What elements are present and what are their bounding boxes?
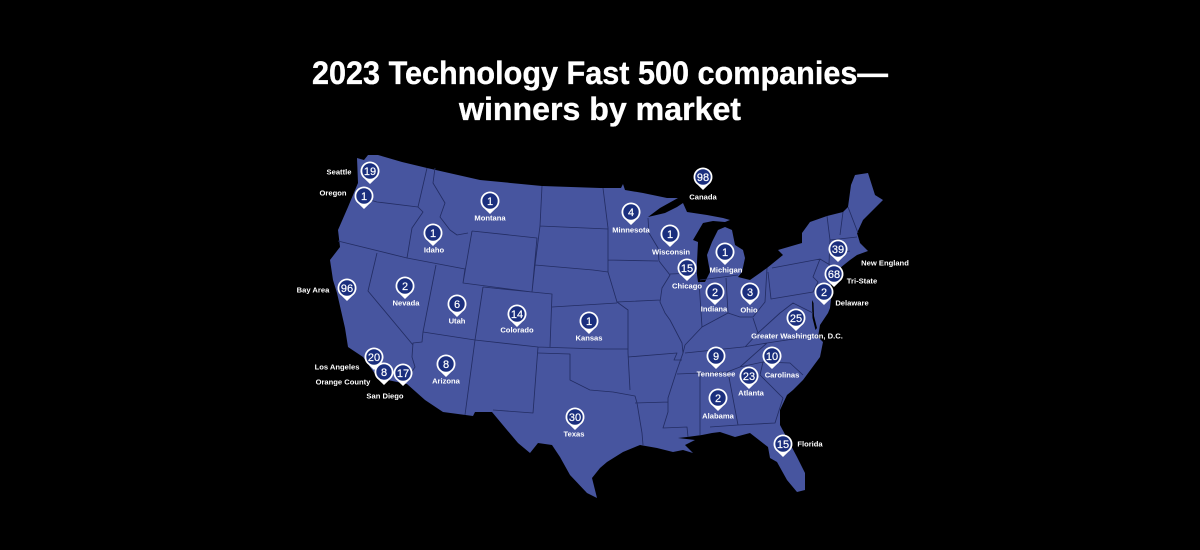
pin: Seattle 19: 19 (364, 166, 376, 178)
pin: Wisconsin 1: Wisconsin (652, 248, 690, 257)
pin: Atlanta 23: Atlanta (738, 389, 765, 398)
pin: Chicago 15: Chicago (672, 282, 702, 291)
pin: Minnesota 4: 4 (628, 207, 634, 219)
pin: Minnesota 4: Minnesota (612, 226, 651, 235)
title (312, 55, 888, 127)
pin: Atlanta 23: 23 (743, 371, 755, 383)
map of the United States (330, 155, 883, 498)
pin: Nevada 2: 2 (402, 281, 408, 293)
pin: Michigan 1: Michigan (710, 266, 743, 275)
pin: Chicago 15: 15 (681, 263, 693, 275)
pin: Wisconsin 1: 1 (667, 229, 673, 241)
pin: Los Angeles 20 (315, 348, 384, 372)
pin: Greater Washington, D.C. 25 (751, 309, 843, 341)
pin: Canada 98: 98 (697, 172, 709, 184)
pin: Nevada 2 (392, 277, 420, 308)
pin: Chicago 15 (672, 259, 702, 291)
pin: Kansas 1 (575, 312, 603, 343)
pin: Tennessee 9: 9 (713, 351, 719, 363)
pin: Oregon 1 (319, 187, 374, 209)
pin: Ohio 3: 3 (747, 287, 753, 299)
Chesapeake Bay (812, 300, 817, 330)
pin: Orange County 8: 8 (381, 367, 387, 379)
pin: Wisconsin 1 (652, 225, 690, 257)
pin: Carolinas 10 (762, 347, 799, 380)
pin: Texas 30: Texas (564, 430, 584, 439)
pin: San Diego 17 (366, 364, 412, 401)
pin: Arizona 8: Arizona (432, 377, 461, 386)
pin: Bay Area 96: 96 (341, 283, 353, 295)
pin: Orange County 8: Orange County (316, 378, 371, 387)
pin: Montana 1: Montana (474, 214, 506, 223)
pin: Montana 1 (474, 192, 506, 223)
pin: San Diego 17: 17 (397, 368, 409, 380)
pin: Kansas 1: Kansas (575, 334, 603, 343)
pin: Bay Area 96: Bay Area (297, 286, 330, 295)
pin: Utah 6 (448, 295, 466, 326)
pin: Tri-State 68 (824, 265, 877, 287)
pin: Michigan 1: 1 (722, 247, 728, 259)
pin: Tennessee 9: Tennessee (697, 370, 735, 379)
pin: Greater Washington, D.C. 25: Greater Washington, D.C. (751, 332, 843, 341)
pin: Oregon 1: Oregon (319, 189, 347, 198)
pin: Seattle 19 (327, 162, 380, 184)
pin: Michigan 1 (710, 243, 743, 275)
pin: Minnesota 4 (612, 203, 651, 235)
pin: New England 39 (828, 240, 909, 268)
pin: Los Angeles 20: 20 (368, 352, 380, 364)
pin: Oregon 1: 1 (361, 191, 367, 203)
pin: Texas 30 (564, 408, 584, 439)
pin: Canada 98 (689, 168, 717, 202)
pin: Delaware 2: Delaware (835, 299, 869, 308)
title: winners by market (458, 91, 741, 127)
pin: Bay Area 96 (297, 279, 356, 301)
country outline (330, 155, 883, 498)
pin: Atlanta 23 (738, 367, 765, 398)
pin: Indiana 2 (701, 283, 728, 314)
pin: New England 39: New England (861, 259, 909, 268)
pin: New England 39: 39 (832, 244, 844, 256)
pin: Alabama 2: Alabama (702, 412, 735, 421)
title: 2023 Technology Fast 500 companies— (312, 55, 888, 91)
pin: Montana 1: 1 (487, 196, 493, 208)
pin: Ohio 3: Ohio (740, 306, 758, 315)
pin: Tri-State 68: 68 (828, 269, 840, 281)
pin: Canada 98: Canada (689, 193, 717, 202)
pin: Idaho 1: 1 (430, 228, 436, 240)
pin: Tri-State 68: Tri-State (847, 277, 877, 286)
pin: Indiana 2: 2 (712, 287, 718, 299)
pin: Idaho 1: Idaho (424, 246, 444, 255)
pin: Colorado 14 (500, 305, 534, 335)
pin: Florida 15 (773, 435, 823, 457)
pin: Texas 30: 30 (569, 412, 581, 424)
pin: Utah 6: Utah (449, 317, 466, 326)
pin: Utah 6: 6 (454, 299, 460, 311)
pin: Arizona 8: 8 (443, 359, 449, 371)
pin: Delaware 2 (815, 283, 869, 308)
pin: Indiana 2: Indiana (701, 305, 728, 314)
state borders (338, 168, 858, 445)
pin: Colorado 14: 14 (511, 309, 523, 321)
pin: Florida 15: 15 (777, 439, 789, 451)
pin: Idaho 1 (424, 224, 444, 255)
pin: Greater Washington, D.C. 25: 25 (790, 313, 802, 325)
pin: Florida 15: Florida (797, 440, 823, 449)
pin: Alabama 2: 2 (715, 393, 721, 405)
pin: Tennessee 9 (697, 347, 735, 379)
pin: Delaware 2: 2 (821, 287, 827, 299)
pin: Ohio 3 (740, 283, 760, 315)
pin: Alabama 2 (702, 389, 735, 421)
pin: Carolinas 10: Carolinas (765, 371, 799, 380)
pin: Los Angeles 20: Los Angeles (315, 363, 359, 372)
pin: Orange County 8 (316, 363, 394, 387)
pin: Seattle 19: Seattle (327, 168, 351, 177)
pin: San Diego 17: San Diego (366, 392, 404, 401)
pin: Kansas 1: 1 (586, 316, 592, 328)
pin: Colorado 14: Colorado (500, 326, 534, 335)
pin: Nevada 2: Nevada (392, 299, 420, 308)
pin: Arizona 8 (432, 355, 461, 386)
pin: Carolinas 10: 10 (766, 351, 778, 363)
